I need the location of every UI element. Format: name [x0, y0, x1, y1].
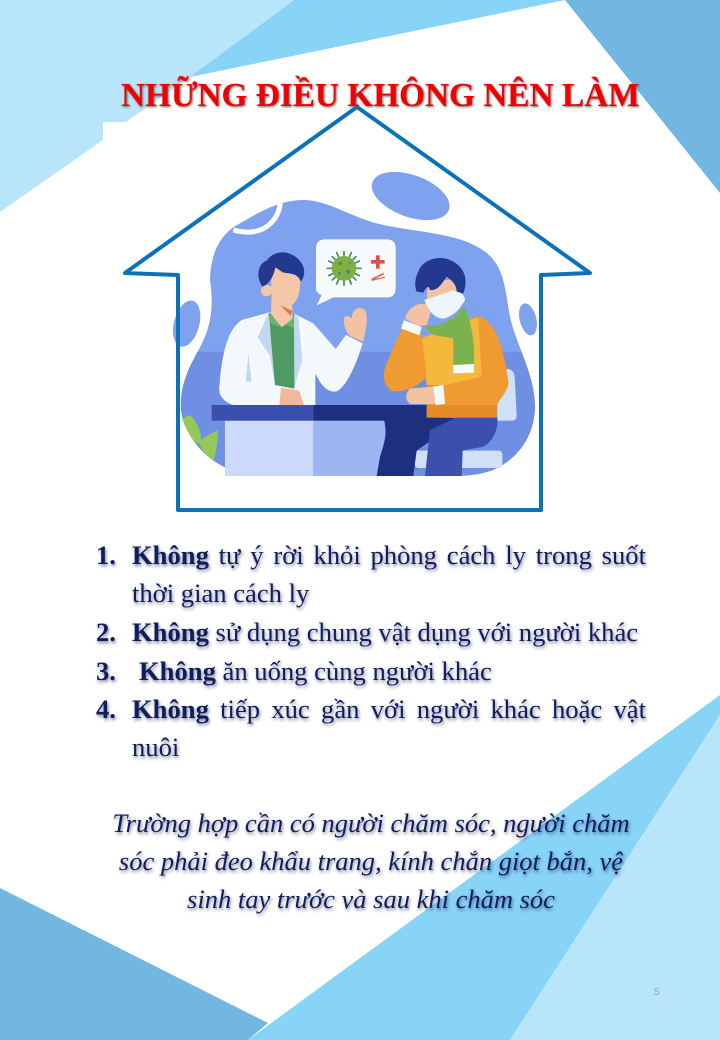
item 1: thời gian cách ly	[132, 578, 309, 608]
desk	[212, 405, 427, 476]
item 4: nuôi	[132, 732, 179, 762]
doctor	[219, 252, 367, 405]
icon: virus	[327, 252, 361, 285]
item 3: 3.	[96, 656, 116, 686]
background: bottom right light band	[510, 715, 720, 1040]
item 4: Không tiếp xúc gần với người khác hoặc vật	[132, 694, 646, 724]
house outline	[125, 107, 590, 510]
background: bottom middle blue band	[248, 695, 720, 1040]
item 4	[96, 694, 648, 762]
blob: right oval	[516, 301, 540, 337]
speech bubble with virus	[316, 239, 396, 305]
background: top left light triangle	[0, 0, 294, 212]
list of things not to do	[96, 540, 648, 762]
item 1: 1.	[96, 540, 116, 570]
plant leaves	[180, 415, 218, 462]
icon: plus and equals	[371, 255, 385, 281]
page number: 5	[654, 987, 660, 998]
item 1: Không tự ý rời khỏi phòng cách ly trong suốt	[132, 540, 646, 570]
italic care note: sinh tay trước và sau khi chăm sóc	[187, 884, 555, 914]
item 3: Không ăn uống cùng người khác	[139, 656, 492, 686]
background: top middle blue band	[190, 0, 565, 77]
background: top right dark corner	[565, 0, 720, 193]
patient	[377, 258, 509, 476]
item 2: 2.	[96, 617, 116, 647]
item 1	[96, 540, 648, 612]
item 2: Không sử dụng chung vật dụng với người khác	[132, 617, 638, 647]
italic care note: sóc phải đeo khẩu trang, kính chắn giọt bắn, vệ	[119, 846, 623, 876]
italic care note	[112, 808, 632, 918]
italic care note: Trường hợp cần có người chăm sóc, người chăm	[112, 808, 630, 838]
background: bottom left dark corner	[0, 888, 268, 1040]
blob: top oval	[365, 162, 456, 230]
title: NHỮNG ĐIỀU KHÔNG NÊN LÀM	[121, 77, 640, 114]
chair	[415, 369, 517, 468]
item 4: 4.	[96, 694, 116, 724]
blob background	[180, 200, 535, 476]
illustration: doctor and masked patient	[168, 162, 550, 478]
blob: left oval	[168, 298, 205, 350]
